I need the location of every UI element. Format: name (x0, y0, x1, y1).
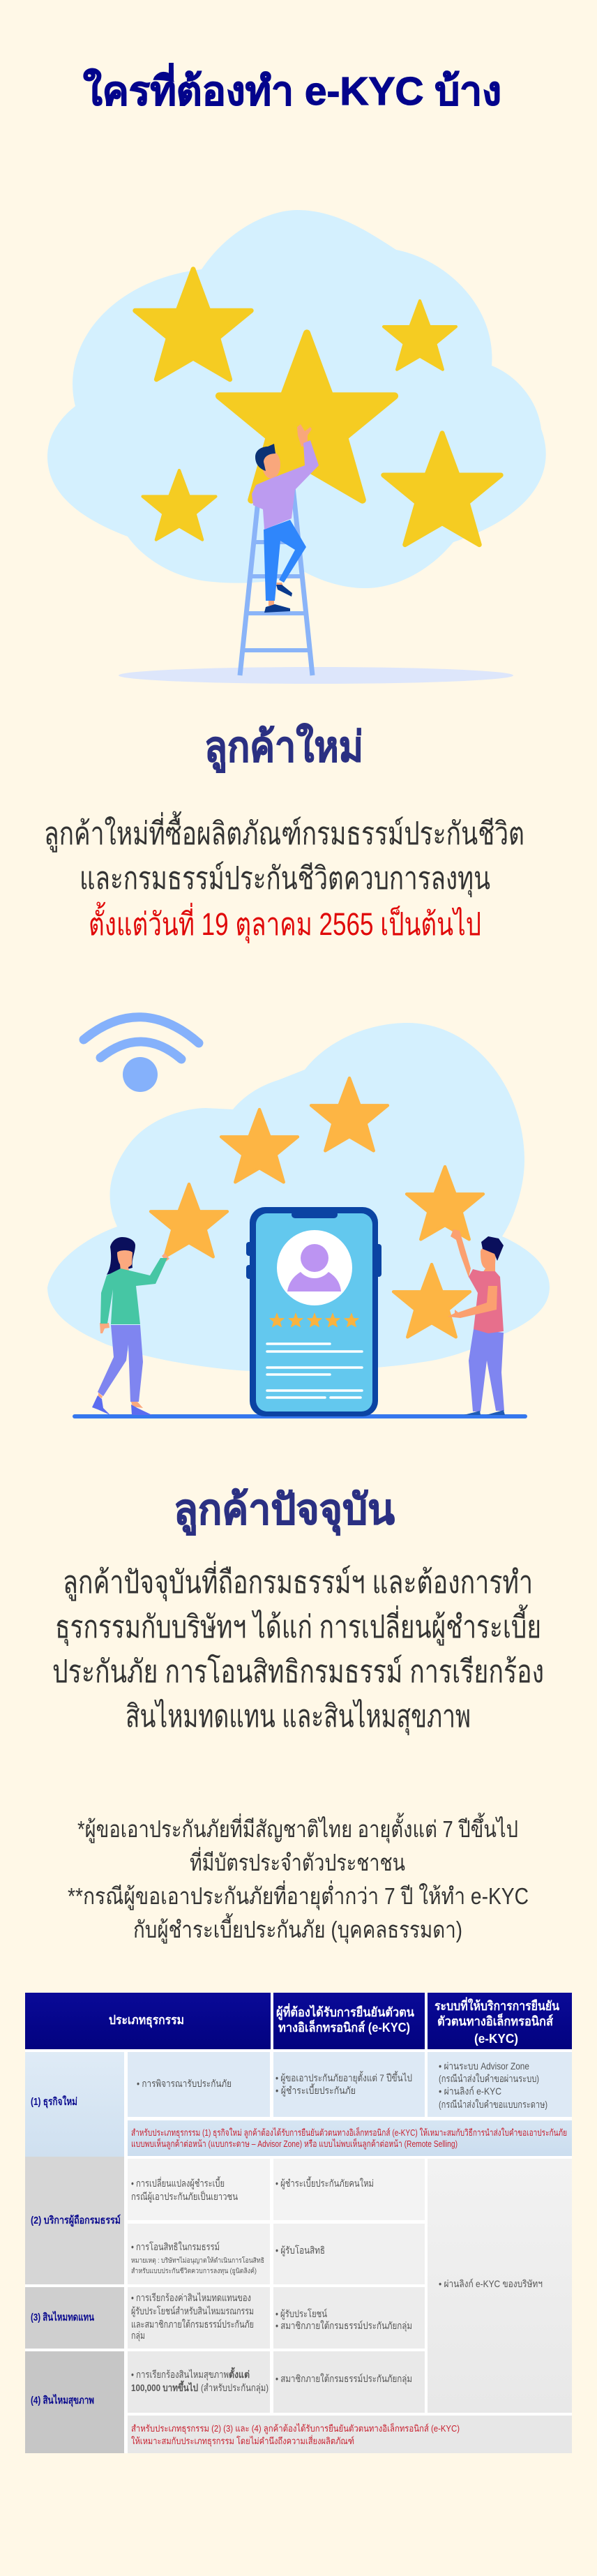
row 2: policyholder services: กรณีผู้เอาประกันภัยเป็นเยาวชน (131, 2190, 238, 2203)
text block: footnotes: ที่มีบัตรประจำตัวประชาชน (190, 1847, 405, 1875)
row 3: claims: (3) สินไหมทดแทน (31, 2310, 95, 2323)
row 3: claims: กลุ่ม (131, 2330, 145, 2342)
header row: ระบบที่ให้บริการการยืนยัน (434, 1997, 560, 2013)
header row (25, 1993, 572, 2049)
text block: footnotes: กับผู้ชำระเบี้ยประกันภัย (บุคคลธรรมดา) (133, 1913, 462, 1944)
header row: ผู้ที่ต้องได้รับการยืนยันตัวตน (276, 2003, 415, 2021)
row 4: health claims: ตั้งแต่ (229, 2367, 250, 2380)
row 4: health claims: • การเรียกร้องสินไหมสุขภาพ (131, 2369, 229, 2381)
note: new business red remark (128, 2120, 572, 2156)
row 2: policyholder services: (2) บริการผู้ถือกรมธรรม์ (31, 2214, 121, 2227)
row 1: new business: (กรณีนำส่งใบคำขอผ่านระบบ) (439, 2073, 539, 2084)
note: services red remark: สำหรับประเภทธุรกรรม (2) (3) และ (4) ลูกค้าต้องได้รับการยืนยันตัวตนทางอิเล็กทรอนิกส์ (e-KYC) (131, 2422, 460, 2434)
phone (246, 1207, 381, 1416)
ladder (240, 487, 312, 675)
woman holding star (92, 1237, 169, 1415)
row 1: new business: • การพิจารณารับประกันภัย (137, 2078, 232, 2089)
note: services red remark (128, 2416, 572, 2453)
row 2: policyholder services: หมายเหตุ : บริษัทฯไม่อนุญาตให้ดำเนินการโอนสิทธิ (131, 2256, 264, 2265)
row 1: new business: • ผู้ชำระเบี้ยประกันภัย (275, 2083, 356, 2097)
ground line (73, 1414, 527, 1418)
header row: (e-KYC) (474, 2032, 518, 2046)
illustration: people rating a phone profile with stars (47, 1017, 550, 1418)
text block: current customer description (52, 1560, 544, 1735)
text block: footnotes: **กรณีผู้ขอเอาประกันภัยที่อายุต่ำกว่า 7 ปี ให้ทำ e-KYC (68, 1880, 529, 1910)
person climbing (252, 424, 319, 613)
row 3: claims: ผู้รับประโยชน์สำหรับสินไหมมรณกรรม (131, 2305, 254, 2317)
row 1: new business: • ผ่านระบบ Advisor Zone (439, 2060, 529, 2072)
row 1: new business: (กรณีนำส่งใบคำขอแบบกระดาษ) (439, 2099, 547, 2110)
illustration: man on ladder reaching for stars (47, 210, 546, 684)
row 2: policyholder services: สำหรับแบบประกันชีวิตควบการลงทุน (ยูนิตลิงค์) (131, 2267, 257, 2275)
row 3: claims: • การเรียกร้องค่าสินไหมทดแทนของ (131, 2292, 251, 2303)
text block: footnotes (68, 1813, 529, 1944)
system cell: e-KYC link (428, 2159, 572, 2413)
row 4: health claims: • สมาชิกภายใต้กรมธรรม์ประกันภัยกลุ่ม (275, 2373, 412, 2385)
ground shadow (119, 667, 513, 684)
row 4: health claims: 100,000 บาทขึ้นไป (131, 2380, 198, 2393)
table: transaction types and e-KYC requirements (25, 1993, 572, 2453)
row 3: claims: • สมาชิกภายใต้กรมธรรม์ประกันภัยกลุ่ม (275, 2320, 412, 2332)
text block: new customer description: และกรมธรรม์ประกันชีวิตควบการลงทุน (80, 860, 490, 897)
icon: wifi (84, 1017, 199, 1092)
heading: new customer: ลูกค้าใหม่ (204, 723, 363, 773)
row 3: claims: • ผู้รับประโยชน์ (275, 2308, 327, 2320)
header row: ตัวตนทางอิเล็กทรอนิกส์ (437, 2013, 554, 2028)
row 1: new business: (1) ธุรกิจใหม่ (31, 2095, 77, 2109)
row 4: health claims: (4) สินไหมสุขภาพ (31, 2393, 94, 2407)
row 1: new business: • ผู้ขอเอาประกันภัยอายุตั้งแต่ 7 ปีขึ้นไป (275, 2071, 412, 2084)
row 2: policyholder services: • ผู้ชำระเบี้ยประกันภัยคนใหม่ (275, 2176, 374, 2189)
heading: current customer: ลูกค้าปัจจุบัน (174, 1486, 395, 1536)
stars (135, 269, 501, 545)
man holding stars (448, 1229, 505, 1415)
text block: new customer description (44, 811, 524, 943)
text block: footnotes: *ผู้ขอเอาประกันภัยที่มีสัญชาติไทย อายุตั้งแต่ 7 ปีขึ้นไป (77, 1813, 518, 1843)
header row: ทางอิเล็กทรอนิกส์ (e-KYC) (278, 2019, 410, 2035)
text block: new customer description: ตั้งแต่วันที่ 19 ตุลาคม 2565 เป็นต้นไป (89, 901, 481, 943)
row 2: policyholder services: • การเปลี่ยนแปลงผู้ชำระเบี้ย (131, 2176, 225, 2189)
header row: ประเภทธุรกรรม (109, 2013, 184, 2028)
cloud background (47, 1023, 550, 1372)
row 2: policyholder services (25, 2157, 425, 2284)
text block: current customer description: สินไหมทดแทน และสินไหมสุขภาพ (126, 1698, 471, 1735)
title: ใครที่ต้องทำ e-KYC บ้าง (83, 63, 501, 114)
row 3: claims: และสมาชิกภายใต้กรมธรรม์ประกันภัย (131, 2319, 254, 2330)
row 3: claims (25, 2287, 425, 2349)
row 4: health claims: (สำหรับประกันกลุ่ม) (201, 2382, 269, 2394)
row 2: policyholder services: • ผู้รับโอนสิทธิ (275, 2245, 325, 2256)
floating stars (151, 1078, 483, 1337)
cloud background (47, 210, 546, 588)
note: services red remark: ให้เหมาะสมกับประเภทธุรกรรม โดยไม่คำนึงถึงความเสี่ยงผลิตภัณฑ์ (131, 2435, 354, 2447)
row 4: health claims (25, 2351, 425, 2453)
row 1: new business (25, 2052, 572, 2157)
row 1: new business: • ผ่านลิงก์ e-KYC (439, 2085, 501, 2097)
system cell: e-KYC link: • ผ่านลิงก์ e-KYC ของบริษัทฯ (439, 2278, 543, 2289)
row 2: policyholder services: • การโอนสิทธิในกรมธรรม์ (131, 2241, 220, 2252)
note: new business red remark: แบบพบเห็นลูกค้าต่อหน้า (แบบกระดาษ – Advisor Zone) หรือ แบบไม่พบเห็นลูกค้าต่อหน้า (Remote Selling) (131, 2137, 458, 2150)
